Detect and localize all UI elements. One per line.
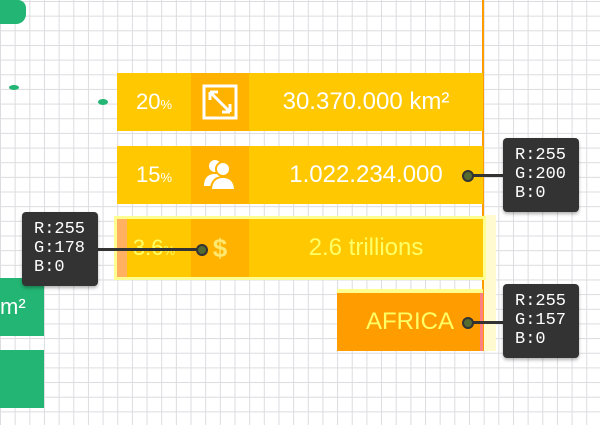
callout: 255 200 0: B:0 — [515, 184, 546, 203]
row: area — [117, 73, 483, 131]
icon: people — [191, 146, 249, 204]
row: area: 30.370.000 km² — [283, 88, 449, 115]
row: population: 1.022.234.000 — [289, 161, 443, 188]
green small islands — [9, 85, 19, 90]
africa label — [337, 289, 483, 293]
text: 2.6 trillions — [309, 234, 423, 261]
text: 3.6% — [133, 235, 175, 260]
row: GDP highlighted — [114, 216, 486, 280]
callout: 255 200 0 — [462, 138, 581, 216]
green bar 1 — [0, 278, 44, 336]
row: area: 20% — [136, 89, 172, 114]
icon: dollar — [191, 219, 249, 277]
callout: 255 178 0: G:178 — [34, 239, 85, 258]
pale highlight strip — [484, 215, 496, 351]
callout: 255 157 0: R:255 — [515, 292, 566, 311]
callout: 255 157 0: B:0 — [515, 330, 546, 349]
callout: 255 178 0: R:255 — [34, 220, 85, 239]
text: AFRICA — [366, 308, 454, 335]
callout: 255 157 0 — [462, 284, 581, 362]
vertical orange line — [482, 0, 484, 351]
green map blob top-left — [0, 0, 26, 24]
callout: 255 178 0: B:0 — [34, 258, 65, 277]
callout: 255 200 0: R:255 — [515, 146, 566, 165]
green small island 2 — [98, 99, 108, 105]
icon: dollar: $ — [213, 233, 227, 263]
green bar 2 — [0, 350, 44, 408]
row: population — [117, 146, 483, 204]
callout: 255 200 0: G:200 — [515, 165, 566, 184]
callout: 255 178 0 — [20, 212, 208, 290]
green bar 1: m² — [0, 294, 26, 319]
icon: resize — [191, 73, 249, 131]
callout: 255 157 0: G:157 — [515, 311, 566, 330]
row: population: 15% — [136, 162, 172, 187]
